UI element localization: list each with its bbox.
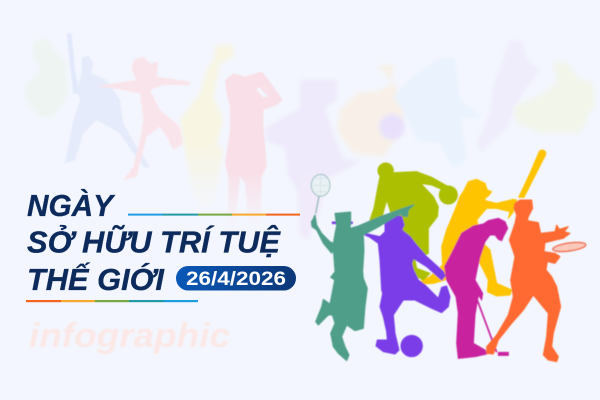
ghost: light blue figure [393,58,483,167]
ghost: blue bat [67,33,79,94]
figure: badminton player (teal) [311,205,414,361]
racket: badminton [311,174,330,213]
figure: bowler (olive) [370,163,457,280]
ghost: orange figure [337,65,405,157]
date pill: 26/4/2026 [186,269,286,290]
title line 3: THẾ GIỚI [27,261,165,297]
figure: footballer (purple) [332,215,450,357]
background: faded athlete silhouettes [25,33,595,240]
ghost: pale green figure [513,62,595,133]
title [27,188,281,297]
bottom rainbow rule [26,300,198,302]
ghost: green figure [25,38,67,117]
ghost: lavender figure [477,40,540,153]
title line 1: NGÀY [27,188,116,223]
ghost: yellow figure [180,45,233,210]
ghost: pink woman [225,72,283,227]
date pill [176,266,296,290]
title line 2: SỞ HỮU TRÍ TUỆ [27,224,281,260]
racket: tennis [552,241,586,253]
figure: tennis player (orange) [487,200,570,362]
top rainbow rule [128,214,300,216]
sports figures [311,150,586,362]
ghost: blue batter [65,55,150,168]
figure: baseball batter (yellow) [420,150,546,296]
figure: golfer (magenta) [445,218,508,358]
ghost: pink runner [97,57,190,180]
ghost: purple ball [379,114,405,140]
ghost: purple central figure [266,80,362,196]
ghost: lavender behind racket [298,172,322,240]
faint watermark word: infographic [29,317,230,355]
